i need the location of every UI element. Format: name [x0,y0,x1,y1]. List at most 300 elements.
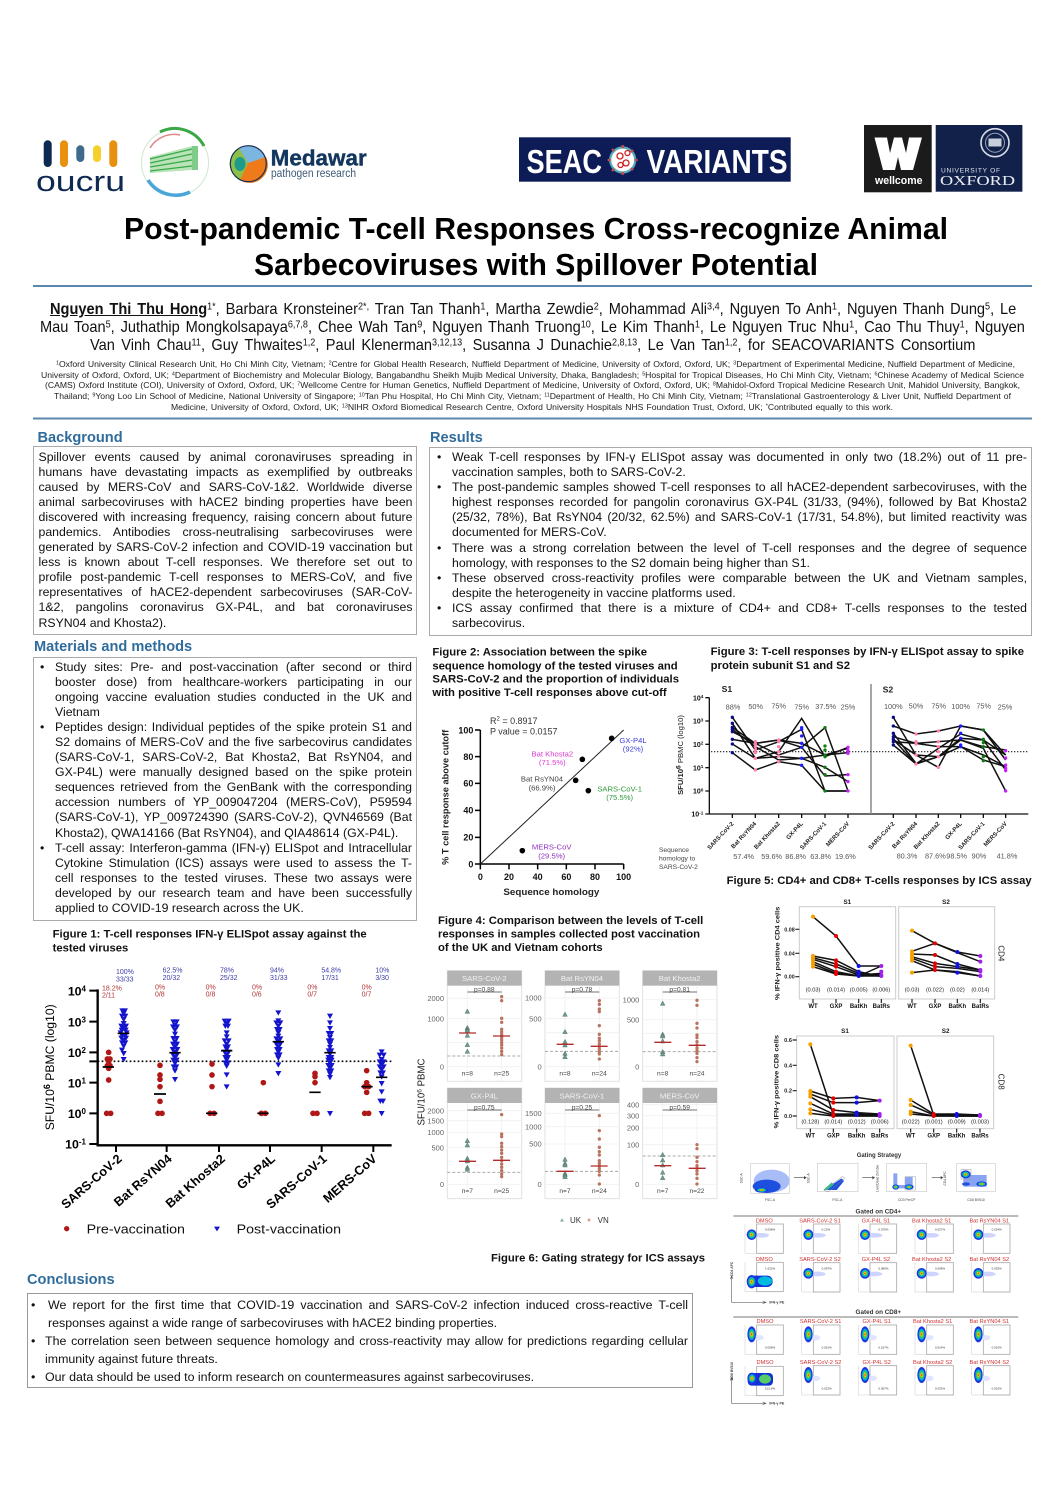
panel: Bat Khosta2: p=0.81 [669,986,690,993]
logo: SEACOVARIANTS banner: VARIANTS [646,143,788,180]
CD4 panels: BatRs [873,1004,891,1010]
CD8 panels: (0.022) [902,1120,920,1126]
figure 6 title: Figure 6: Gating strategy for ICS assays [491,1252,705,1264]
figure 3 axes: Bat Khosta2 [754,821,782,851]
figure 2 axes [440,725,631,897]
figure 3 response percentages: 75% [771,702,786,711]
figure 2 statistics: P value = 0.0157 [490,727,558,737]
panel: MERS-CoV: 200 [627,1124,639,1133]
note: sequence homology: Sequence [659,847,689,854]
authors [40,301,1025,354]
CD8 gating rows: 101.6% [765,1387,775,1391]
figure 4 legend [560,1216,609,1225]
CD8 gating rows: GX-P4L S1 [862,1319,891,1325]
figure 1 axes: 2 [82,1046,87,1055]
figure 3 response percentages: 88% [726,702,741,711]
CD4 gating rows: SARS-CoV-2 S1 [799,1219,841,1225]
text: Background: representatives of hACE2-dependent sarbecoviruses (SAR-CoV- [38,585,412,599]
figure 1 axes: -1 [79,1138,87,1147]
figure 2 axes: 20 [504,872,514,882]
panel: SARS-CoV-1: SARS-CoV-1 [560,1091,604,1100]
CD8 gating rows [730,1309,1018,1406]
affiliations: Thailand; 9Yong Loo Lin School of Medicine, National University of Singapore; 10Tan Phu Hospital, Ho Chi Minh City, Vietnam; 11Department of Health, Ho Chi Minh City, Vietnam; 12Translational Gastroenterology & Liver Unit, Nuffield Department of [54,391,1011,401]
text: Results: These observed cross-reactivity profiles were comparable between the UK and Vietnam samples, [452,571,1027,585]
panel: SARS-CoV-1 [525,1088,619,1199]
text: Materials and methods: Cytokine Stimulation (ICS) assays were used to assess the T- [55,856,412,870]
figure 1 positivity labels: 0/8 [206,992,215,999]
logo: University of Oxford [936,125,1022,192]
text: Materials and methods: accession numbers of YP_009047204 (MERS-CoV), P59594 [55,795,412,809]
logo: Medawar pathogen research: pathogen research [271,166,356,180]
CD4 gating rows: 0.035% [992,1266,1002,1270]
text: Materials and methods: (SARS-CoV-1, SARS-CoV-2, Bat Khosta2, Bat RsYN04, and [55,750,412,764]
figure 5: ICS paired plots [774,899,1006,1140]
panel: Bat RsYN04: n=24 [592,1071,607,1078]
text: Results: despite the heterogeneity in vaccine platforms used. [452,586,736,600]
figure 2 point labels: (66.9%) [529,783,556,792]
figure 1 positivity labels: 25/32 [220,975,238,982]
CD8 panels: (0.006) [871,1120,889,1126]
figure 1 positivity labels [102,968,389,999]
figure 1 positivity labels: 78% [220,968,234,975]
figure 2 point labels [521,736,647,860]
panel: SARS-CoV-1: 0 [537,1180,542,1189]
CD4 gating rows: Bat RsYN04 S2 [970,1257,1009,1263]
figure 2 axes: 0 [478,872,483,882]
panel: GX-P4L: 0 [440,1180,444,1189]
text: • [437,450,441,464]
gating strategy row: FSC-A [765,1198,776,1202]
figure 4 legend: UK [570,1216,582,1225]
text: • [437,541,441,555]
CD4 panels: GXP [929,1004,941,1010]
text: Background: humans have devastating impacts as exemplified by outbreaks [38,465,412,479]
figure 1 axes: SFU/10 [43,1089,57,1130]
text: Background: profile post-pandemic T-cell responses to MERS-CoV, and five [38,570,412,584]
figure 1 axes: Bat Khosta2 [163,1152,228,1211]
panel: SARS-CoV-1: n=24 [592,1188,607,1195]
figure 2 axes: 60 [463,779,473,789]
gating strategy row: CD3 PerCP [898,1198,916,1202]
panel: MERS-CoV: MERS-CoV [660,1091,700,1100]
figure 1 positivity labels: 3/30 [375,975,389,982]
text: Materials and methods: ongoing vaccine evaluation studies conducted in the UK and [55,690,412,704]
figure 3 axes: S1 [722,684,732,694]
figure 1 positivity labels: 54.8% [321,968,341,975]
panel: GX-P4L: 1000 [427,1128,444,1137]
text: Background: caused by MERS-CoV and SARS-CoV-1&2. Worldwide diverse [38,480,412,494]
logo: University of Oxford: UNIVERSITY OF [941,168,1000,174]
figure 1 axes: 0 [82,1107,87,1116]
panel: Bat Khosta2: n=24 [689,1071,705,1078]
figure 1 axes [42,984,392,1212]
author line 2: Mau Toan5, Juthathip Mongkolsapaya6,7,8, Chee Wah Tan9, Nguyen Thanh Truong10, Le Kim Thanh1, Le Nguyen Truc Nhu1, Cao Thu Thuy1, Nguyen [40,319,1025,336]
panel: SARS-CoV-1: 1000 [525,1122,542,1131]
panel: Bat RsYN04: Bat RsYN04 [561,974,604,983]
figure 3 axes: 1 [701,764,704,769]
panel: MERS-CoV: 300 [627,1111,639,1120]
figure 2 axes: 20 [463,833,473,843]
text: Materials and methods: cell responses to the tested viruses. These two assays were [55,871,412,885]
panel: MERS-CoV [627,1088,717,1199]
text: Materials and methods: Vietnam [55,705,100,719]
text: Results: Weak T-cell responses by IFN-γ ELISpot assay was documented in only two (18.2%) out of 11 pre- [452,450,1027,464]
panel: Bat Khosta2: Bat Khosta2 [659,974,701,983]
figure 4 y axis title: 6 [416,1089,423,1093]
text: Materials and methods: GX-P4L) were manually designed based on the spike protein [55,765,412,779]
text: • [437,601,441,615]
figure 2 axes: 100 [616,872,631,882]
text: Results: (25/32, 78%), Bat RsYN04 (20/32, 62.5%) and SARS-CoV-1 (17/31, 54.8%), but limited reactivity was [452,510,1027,524]
figure 3 response percentages: 100% [951,702,971,711]
figure 3 homology percentages: 57.4% [733,852,755,861]
figure 3 axes: Bat RsYN04 [892,821,920,850]
figure 1 positivity labels: 62.5% [163,968,182,975]
logo: Medawar pathogen research [230,145,367,183]
CD8 panels: GXP [927,1134,940,1140]
figure 3 S2 lines [893,717,1006,791]
figure 1 axes: SARS-CoV-2 [59,1152,125,1212]
figure 2: homology correlation scatter [431,647,698,897]
CD8 gating rows: 0.008% [765,1345,775,1349]
figure 3 homology percentages: 41.8% [997,851,1018,860]
text: Materials and methods: applied to COVID-19 research across the UK. [55,901,304,915]
CD8 panels: BatRs [971,1134,989,1140]
figure 1 positivity labels: 17/31 [321,975,339,982]
figure 1 positivity labels: 0% [252,984,262,991]
CD8 gating rows: 0.010% [992,1345,1002,1349]
figure 3 axes: 10 [693,789,701,796]
affiliations [41,359,1024,412]
panel: MERS-CoV: n=22 [689,1188,705,1195]
figure 3 axes: 10 [693,742,701,749]
figure 3 axes: 10 [693,695,701,702]
affiliations: University of Oxford, Oxford, UK; 4Department of Biochemistry and Molecular Biology, Bangabandhu Sheikh Mujib Medical University, Dhaka, Bangladesh; 5Hospital for Tropical Diseases, Ho Chi Minh City, Vietnam; 6Chinese Academy of Medical Science [41,370,1024,380]
text: Background: RSYN04 and Khosta2). [38,616,166,630]
logo: Wellcome [864,125,932,192]
CD4 gating rows: IFN-γ PE [769,1301,785,1305]
figure 3 axes: Bat Khosta2 [913,821,942,851]
panel: GX-P4L: 2000 [427,1106,444,1115]
figure 1 positivity labels: 33/33 [116,976,134,983]
figure 1 title [53,929,367,954]
figure 1 axes: 6 [42,1084,52,1089]
figure 1 axes: MERS-CoV [321,1151,380,1206]
figure 4 title: of the UK and Vietnam cohorts [438,942,603,954]
figure 1 positivity labels: 0% [206,984,216,991]
panel: Bat Khosta2: n=8 [657,1071,669,1078]
figure 4: UK vs Vietnam cohorts [416,915,717,1264]
figure 1 positivity labels: 31/33 [270,975,288,982]
text: Materials and methods: booster dose) from healthcare-workers participating in our [55,675,412,689]
figure 3 axes: -1 [699,810,704,815]
figure 1 positivity labels: 2/11 [102,992,115,999]
text: Background: pandemics. Antibodies cross-neutralising sarbecoviruses were [38,525,412,539]
figure 2 title [431,647,679,699]
affiliations: (CAMS) Oxford Institute (COI), University of Oxford, Oxford, UK; 7Wellcome Centre for Human Genetics, Nuffield Department of Medicine, University of Oxford, Oxford, UK; 8Mahidol-Oxford Tropical Medicine Research Unit, Mahidol University, Bangkok, [45,380,1020,390]
CD8 gating rows: Bat Khosta2 S2 [913,1360,952,1366]
CD4 panels: S2 [942,899,950,906]
figure 3 axes: SARS-CoV-1 [799,821,829,851]
CD4 panels: (0.03) [806,987,821,993]
CD4 gating rows: SARS-CoV-2 S2 [799,1257,841,1263]
CD8 panels: BatKh [848,1134,866,1140]
figure 3 axes: MERS-CoV [825,821,851,848]
CD4 gating rows: DMSO [756,1219,773,1225]
CD8 panels: (0.012) [848,1120,866,1126]
figure 4 legend: VN [598,1216,609,1225]
CD4 panels: (0.03) [905,987,920,993]
CD8 gating rows: Bat RsYN04 S2 [970,1360,1009,1366]
heading: Background: Background [38,430,123,446]
CD8 panels: BatRs [871,1134,889,1140]
figure 3 S1 lines [732,717,848,791]
text: Background: Spillover events caused by animal coronaviruses spreading in [38,450,412,464]
CD4 gating rows: 0.008% [765,1228,775,1232]
figure 4 y axis title: SFU/10 [416,1093,427,1126]
figure 3 title: protein subunit S1 and S2 [711,660,850,672]
figure 1 axes: 10 [68,1107,82,1121]
figure 3 homology percentages: 98.5% [946,851,968,860]
figure 2 axes: 60 [561,872,571,882]
figure 1 axes: 1 [82,1076,87,1085]
figure 3 response percentages: 75% [976,702,991,711]
figure 3 axes: SARS-CoV-2 [707,821,736,851]
CD4 panels: % IFN-γ positive CD4 cells [774,906,781,1000]
text: Background: animal sarbecoviruses with hACE2 binding properties have been [38,495,412,509]
text: • [437,571,441,585]
CD4 gating rows: GX-P4L S2 [862,1257,890,1263]
figure 2 axes: Sequence homology [503,887,599,897]
panel: SARS-CoV-2: 0 [440,1062,444,1071]
text: Conclusions [31,1298,688,1384]
title: Post-pandemic T-cell Responses Cross-recognize Animal [124,211,948,246]
panel: SARS-CoV-2: SARS-CoV-2 [462,974,507,983]
figure 3 homology percentages: 59.6% [761,852,783,861]
gating strategy row: CD8 BV510 [967,1198,985,1202]
panel: GX-P4L: n=25 [494,1188,509,1195]
figure 3 axes: 10 [693,719,701,726]
figure 2 point labels: Bat Khosta2 [531,749,573,758]
figure 3 response percentages [726,702,1013,712]
text: • [40,660,44,674]
figure 1 positivity labels: 20/32 [163,975,180,982]
CD8 gating rows: 0.022% [822,1387,832,1391]
CD4 panels: (0.006) [872,987,890,993]
figure 2 title: SARS-CoV-2 and the proportion of individuals [432,674,679,686]
CD8 gating rows: 0.051% [822,1345,832,1349]
CD8 gating rows: CD8 BV510 [730,1362,734,1380]
CD4 panels: GXP [830,1004,842,1010]
figure 1 post-vaccination points [121,1011,384,1113]
affiliations: Medicine, University of Oxford, Oxford, UK; 13NIHR Oxford Biomedical Research Centre, Oxford University Hospitals NHS Foundation Trust, Oxford, UK; *Contributed equally to this work. [171,402,893,412]
text: • [31,1370,35,1384]
panel: SARS-CoV-1: 500 [529,1140,542,1149]
figure 3 homology percentages: 63.8% [810,852,832,861]
text: • [31,1298,35,1312]
CD8 panels: (0.003) [971,1120,989,1126]
CD8 panels: WT [906,1134,916,1140]
panel: GX-P4L: n=7 [462,1188,473,1195]
text: Materials and methods: Peptides design: Individual peptides of the spike protein S1 and [55,720,412,734]
figure 2 point labels: SARS-CoV-1 [597,784,642,793]
text: Results: The post-pandemic samples showed T-cell responses to all hACE2-dependent sarbecoviruses, with the [452,480,1027,494]
logo: SEACOVARIANTS banner: SEAC [526,143,602,180]
text: Background: less is known about T-cell responses. We therefore set out to [38,555,412,569]
CD4 gating rows: 0.097% [822,1266,832,1270]
CD8 panels: S2 [942,1028,950,1035]
figure 1 positivity labels: 18.2% [102,985,122,992]
CD4 panels: (0.022) [926,987,944,993]
figure 3 title [711,646,1024,672]
CD8 panels: BatKh [948,1134,966,1140]
figure 3 axes: SARS-CoV-1 [958,821,987,851]
panel: SARS-CoV-2: n=25 [494,1071,509,1078]
CD4 panels: CD4 [997,945,1006,962]
figure 3 homology percentages [733,851,1018,861]
panel: SARS-CoV-2: 2000 [427,994,444,1003]
figure 2 statistics: 2 [496,717,500,723]
gating strategy row: SSC-A [806,1172,810,1183]
panel: Bat RsYN04: 500 [529,1014,542,1023]
figure 3 axes: GX-P4L [945,821,964,841]
CD4 gating rows: 0.070% [878,1228,889,1232]
text: Conclusions: We report for the first time that COVID-19 vaccination and SARS-CoV-2 infection induced cross-reactive T-cell [48,1298,688,1312]
CD8 gating rows: SARS-CoV-2 S2 [800,1360,841,1366]
figure 2 point labels: MERS-CoV [532,843,572,852]
figure 1 axes: 10 [68,1046,82,1060]
CD8 gating rows: 0.017% [878,1345,889,1349]
CD8 panels: S1 [841,1028,849,1035]
CD8 panels: % IFN-γ positive CD8 cells [774,1034,781,1128]
figure 3 homology percentages: 87.6% [925,851,946,860]
CD8 panels: GXP [827,1134,840,1140]
figure 3 axes: 10 [693,765,701,772]
text: • [437,480,441,494]
panel: Conclusions [27,1293,693,1388]
CD4 panels: (0.014) [827,987,845,993]
figure 1 axes: 10 [68,1076,82,1090]
figure 1 legend: Pre-vaccination [87,1221,185,1236]
figure 3 homology percentages: 90% [972,851,987,860]
figure 3 axes: SARS-CoV-2 [868,821,897,851]
title [124,211,948,282]
figure 3 homology percentages: 86.8% [785,852,807,861]
figure 1 positivity labels: 0% [155,984,165,991]
figure 2 axes: 0 [468,859,473,869]
text: Results [437,450,1027,630]
text: • [40,720,44,734]
author line 1: Nguyen Thi Thu Hong1*, Barbara Kronsteiner2*, Tran Tan Thanh1, Martha Zewdie2, Mohammad Ali3,4, Nguyen To Anh1, Nguyen Thanh Dung5, Le [50,301,1016,318]
figure 2 axes: 40 [463,806,473,816]
panel: Bat RsYN04: p=0.78 [572,986,593,993]
CD4 gating rows: 0.027% [935,1228,945,1232]
figure 2 points [522,738,612,851]
CD8 panels [774,1028,1006,1140]
panel: Bat RsYN04 [525,971,619,1081]
text: Results: homology, with responses to the S2 domain being higher than S1. [452,556,810,570]
logo: OUCRU: oucru [36,166,125,198]
CD4 panels: BatKh [850,1004,868,1010]
text: Results: vaccination samples, both to SARS-CoV-2. [452,465,686,479]
figure 4 y axis title: PBMC [416,1058,427,1089]
CD4 panels: (0.005) [850,987,868,993]
figure 2 point labels: Bat RsYN04 [521,775,564,784]
text: Materials and methods: Khosta2), QWA14166 (Bat RsYN04), and QIA48614 (GX-P4L). [55,826,398,840]
heading: Results: Results [430,430,483,446]
panel: SARS-CoV-2: p=0.88 [474,986,495,993]
figure 2 title: with positive T-cell responses above cut-off [431,687,667,699]
figure 3 axes: 6 [675,765,682,769]
CD4 panels: (0.02) [950,987,965,993]
figure 1 axes: 10 [68,984,82,998]
figure 3 axes: GX-P4L [786,821,805,841]
figure 1 positivity labels: 0/8 [155,992,165,999]
gating strategy row: Live/Dead Zombie [875,1165,879,1192]
CD8 gating rows: IFN-γ PE [769,1402,785,1406]
figure 1 positivity labels: 10% [375,968,389,975]
panel: GX-P4L: GX-P4L [471,1091,498,1100]
panel: SARS-CoV-1: n=7 [559,1188,571,1195]
logos row [36,125,1022,198]
text: Background: generated by SARS-CoV-2 infection and COVID-19 vaccination but [38,540,412,554]
CD8 gating rows: 0.014% [935,1345,945,1349]
figure 3 response percentages: 25% [998,702,1013,711]
panel: MERS-CoV: 100 [627,1140,639,1149]
CD4 gating rows: Gated on CD4+ [856,1208,901,1215]
figure 3 axes: MERS-CoV [983,821,1009,848]
figure 2 point labels: GX-P4L [619,736,647,745]
text: Conclusions: responses against a wide range of sarbecoviruses with hACE2 binding properties. [48,1316,497,1330]
figure 1 axes: Bat RsYN04 [111,1152,175,1209]
CD4 panels: 0.04 [784,951,795,957]
figure 3 response percentages: 37.5% [815,702,837,711]
text: Materials and methods: developed by our research team and have been successfully [55,886,412,900]
figure 3 axes: 3 [701,717,704,722]
text: • [31,1334,35,1348]
figure 2 title: sequence homology of the tested viruses and [432,660,678,672]
author line 3: Van Vinh Chau11, Guy Thwaites1,2, Paul Klenerman3,12,13, Susanna J Dunachie2,8,13, Le Van Tan1,2, for SEACOVARIANTS Consortium [90,337,975,354]
logo: SEACOVARIANTS banner [519,137,791,182]
panel: GX-P4L: 500 [431,1143,444,1152]
figure 2 point labels: (92%) [623,744,644,753]
CD4 panels: WT [907,1004,917,1010]
panel: SARS-CoV-2: n=8 [462,1071,473,1078]
heading: Conclusions: Conclusions [27,1272,115,1288]
figure 1 positivity labels: 0/7 [362,992,371,999]
figure 1 axes: GX-P4L [234,1152,278,1192]
figure 1 title: tested viruses [53,942,128,954]
figure 1 axes: 10 [65,1138,79,1152]
figure 1 positivity labels: 94% [270,968,284,975]
CD4 gating rows: DMSO [756,1257,773,1263]
figure 4 title [438,915,703,954]
CD4 gating rows: Bat RsYN04 S1 [970,1219,1009,1225]
figure 2 statistics [490,716,558,737]
figure 1 title: Figure 1: T-cell responses IFN-γ ELISpot assay against the [53,929,367,941]
figure 2 point labels: (29.5%) [538,851,566,860]
CD4 gating rows: 1.622% [765,1266,775,1270]
panel: Bat Khosta2: 1000 [623,995,639,1004]
note: sequence homology [659,847,698,871]
figure 1: ELISpot dot plot [42,929,392,1236]
figure 4 title: Figure 4: Comparison between the levels of T-cell [438,915,703,927]
panel: MERS-CoV: n=7 [657,1188,669,1195]
text: Materials and methods: sequences retrieved from the GenBank with the corresponding [55,780,412,794]
CD4 gating rows [730,1208,1018,1305]
text: Results: documented for MERS-CoV. [452,525,607,539]
figure 2 point labels: (75.5%) [606,793,634,802]
